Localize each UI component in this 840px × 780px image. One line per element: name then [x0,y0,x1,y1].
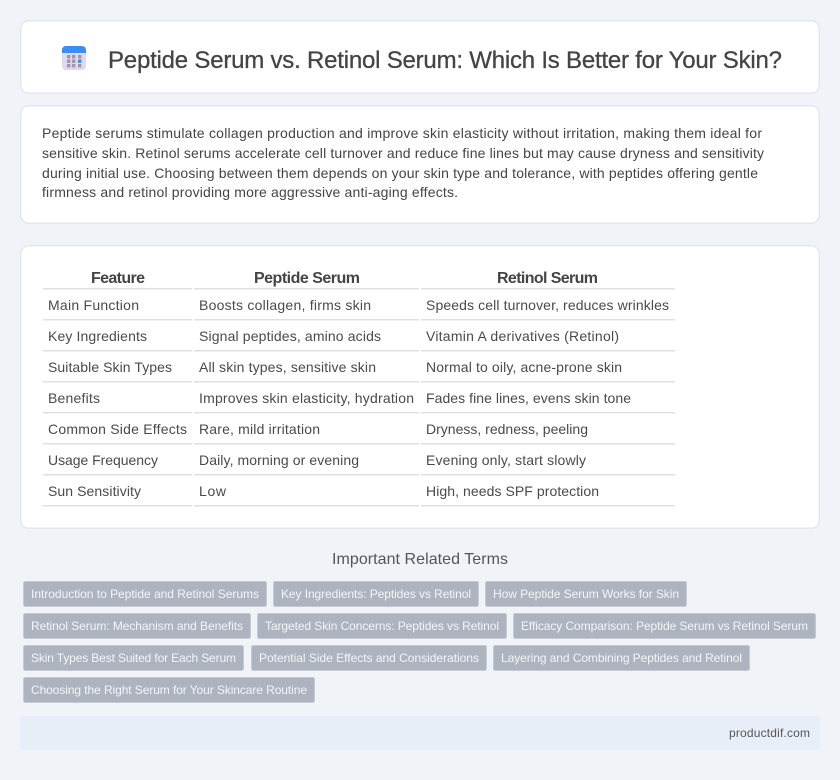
row: common side effects: Common Side Effects [48,421,187,437]
title: Peptide Serum vs. Retinol Serum: Which Is Better for Your Skin? [108,47,782,74]
row: benefits: Benefits [48,390,100,406]
row: main function: Main Function [48,297,139,313]
tag [24,582,266,606]
row: usage frequency: Daily, morning or evening [199,452,359,468]
table header: Retinol Serum [497,270,598,287]
text block: introduction: firmness and retinol providing more aggressive anti-aging effects. [42,184,458,200]
row: key ingredients: Signal peptides, amino acids [199,328,381,344]
row: suitable skin types: Normal to oily, acne-prone skin [426,359,622,375]
row: sun sensitivity: Sun Sensitivity [48,483,141,499]
row: usage frequency [48,452,586,468]
tag: Efficacy Comparison: Peptide Serum vs Retinol Serum [521,619,808,633]
row: suitable skin types: All skin types, sensitive skin [199,359,376,375]
row: benefits: Improves skin elasticity, hydration [199,390,414,406]
tag: Skin Types Best Suited for Each Serum [31,651,236,665]
row: benefits [48,390,631,406]
row: main function: Speeds cell turnover, reduces wrinkles [426,297,669,313]
table header: Feature [91,270,145,287]
row: benefits: Fades fine lines, evens skin tone [426,390,631,406]
icon: calendar grid [62,46,86,70]
row: main function: Boosts collagen, firms skin [199,297,371,313]
footer [20,716,820,750]
panel: introduction [21,106,819,223]
tag [494,646,750,670]
row: main function [48,297,669,313]
panel: header [21,21,819,93]
row: sun sensitivity: High, needs SPF protection [426,483,599,499]
tag: How Peptide Serum Works for Skin [493,587,679,601]
tag [274,582,478,606]
related term tags [24,582,816,702]
panel: comparison table [21,246,819,528]
tag: Targeted Skin Concerns: Peptides vs Retinol [265,619,499,633]
row: sun sensitivity [48,483,599,499]
tag: Potential Side Effects and Considerations [259,651,479,665]
tag: Retinol Serum: Mechanism and Benefits [31,619,243,633]
row: key ingredients [48,328,619,344]
tag: Introduction to Peptide and Retinol Serums [31,587,259,601]
row: key ingredients: Key Ingredients [48,328,147,344]
tag [24,614,250,638]
tag [24,678,314,702]
heading: important related terms: Important Related Terms [332,551,508,568]
row: suitable skin types: Suitable Skin Types [48,359,172,375]
row: common side effects [48,421,588,437]
tag [514,614,816,638]
row: common side effects: Rare, mild irritation [199,421,320,437]
row: suitable skin types [48,359,622,375]
tag: Choosing the Right Serum for Your Skincare Routine [31,683,307,697]
tag [486,582,686,606]
text block: introduction [42,125,764,200]
text block: introduction: during initial use. Choosing between them depends on your skin type and tolerance, with peptides offering gentle [42,165,758,181]
text block: introduction: sensitive skin. Retinol serums accelerate cell turnover and reduce fine lines but may cause dryness and sensitivity [42,145,764,161]
row: common side effects: Dryness, redness, peeling [426,421,588,437]
tag [252,646,486,670]
row: usage frequency: Usage Frequency [48,452,158,468]
tag: Layering and Combining Peptides and Retinol [501,651,742,665]
row: sun sensitivity: Low [199,483,227,499]
table header: Peptide Serum [254,270,360,287]
text block: introduction: Peptide serums stimulate collagen production and improve skin elasticity without irritation, making them ideal for [42,125,762,141]
row: usage frequency: Evening only, start slowly [426,452,586,468]
tag [24,646,244,670]
table header [91,270,598,287]
tag: Key Ingredients: Peptides vs Retinol [281,587,471,601]
tag [258,614,506,638]
footer source: productdif.com [729,726,810,740]
row: key ingredients: Vitamin A derivatives (Retinol) [426,328,619,344]
